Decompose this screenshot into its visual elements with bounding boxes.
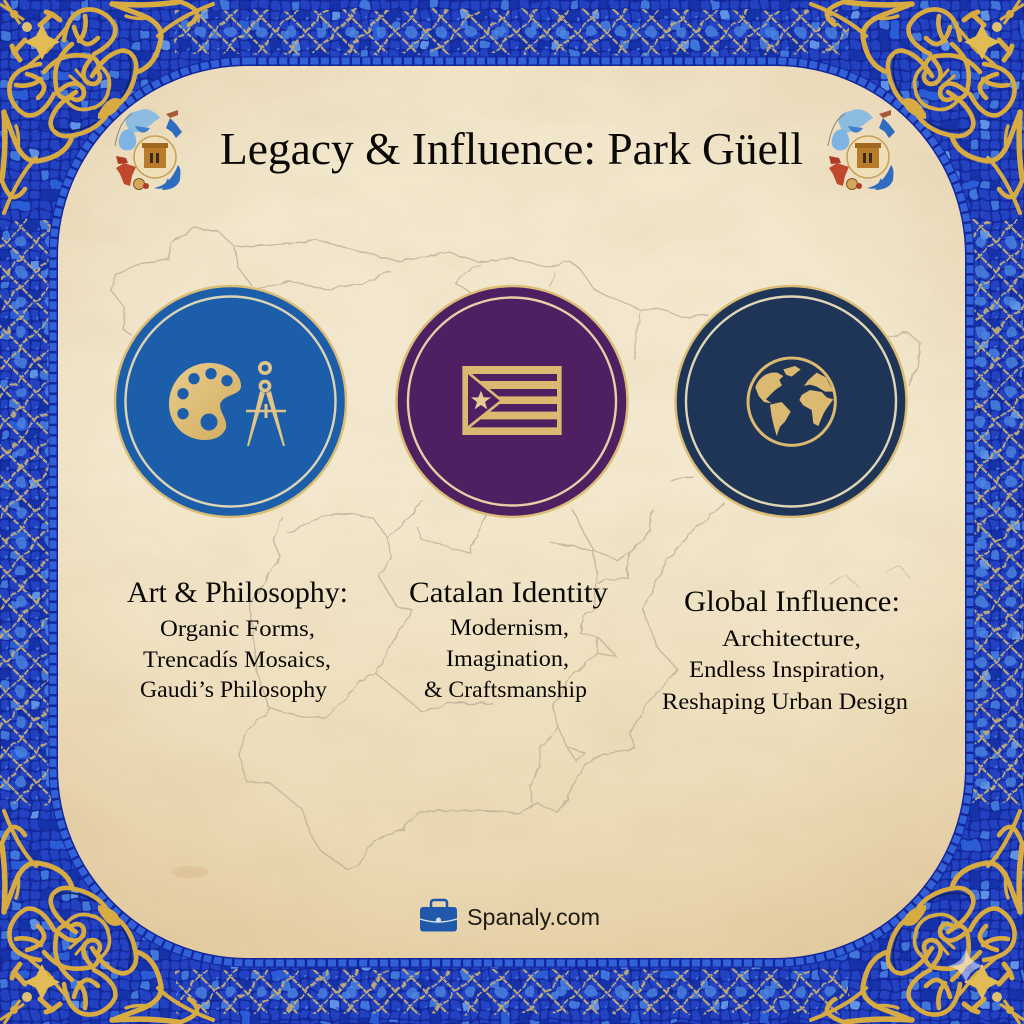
crest: right <box>828 109 895 190</box>
icon: palette <box>169 363 241 440</box>
text: global influence details: Architecture, <box>722 626 861 652</box>
text: art and philosophy details: Trencadís Mosaics, <box>143 647 331 673</box>
map of Spain <box>111 228 920 869</box>
icon: sparkle watermark <box>948 948 984 984</box>
text: catalan identity details: Imagination, <box>446 646 569 672</box>
icon: compass <box>246 363 286 446</box>
text: catalan identity details: Modernism, <box>450 615 569 641</box>
corner ornament: top right <box>811 0 1024 213</box>
crest: left <box>115 109 182 190</box>
text: catalan identity details <box>424 615 587 703</box>
panel: catalan identity <box>396 286 628 703</box>
panel: parchment <box>58 66 965 958</box>
corner ornament: top left <box>0 0 213 213</box>
text: global influence details: Endless Inspiration, <box>689 657 885 683</box>
panel: global influence <box>662 286 908 715</box>
text: catalan identity details: & Craftsmanship <box>424 677 587 703</box>
badge: navy circle <box>676 286 906 517</box>
brand name: Spanaly.com <box>467 904 600 930</box>
panel: art and philosophy <box>115 286 348 703</box>
heading: catalan identity: Catalan Identity <box>409 577 608 609</box>
text: art and philosophy details: Organic Forms, <box>160 616 315 642</box>
heading: art and philosophy: Art & Philosophy: <box>127 577 348 609</box>
text: art and philosophy details <box>140 616 331 703</box>
text: art and philosophy details: Gaudi’s Philosophy <box>140 677 327 703</box>
corner ornament: bottom left <box>0 811 213 1024</box>
icon: globe <box>748 358 835 445</box>
text: global influence details <box>662 626 908 715</box>
corner ornament: bottom right <box>811 811 1024 1024</box>
badge: purple circle <box>396 286 628 517</box>
badge: blue circle <box>115 286 346 517</box>
icon: flag <box>462 366 562 435</box>
icon: briefcase <box>420 900 457 932</box>
text: global influence details: Reshaping Urban Design <box>662 689 908 715</box>
footer: brand <box>420 900 600 932</box>
title: Legacy & Influence: Park Güell <box>220 123 803 174</box>
heading: global influence: Global Influence: <box>684 586 900 618</box>
